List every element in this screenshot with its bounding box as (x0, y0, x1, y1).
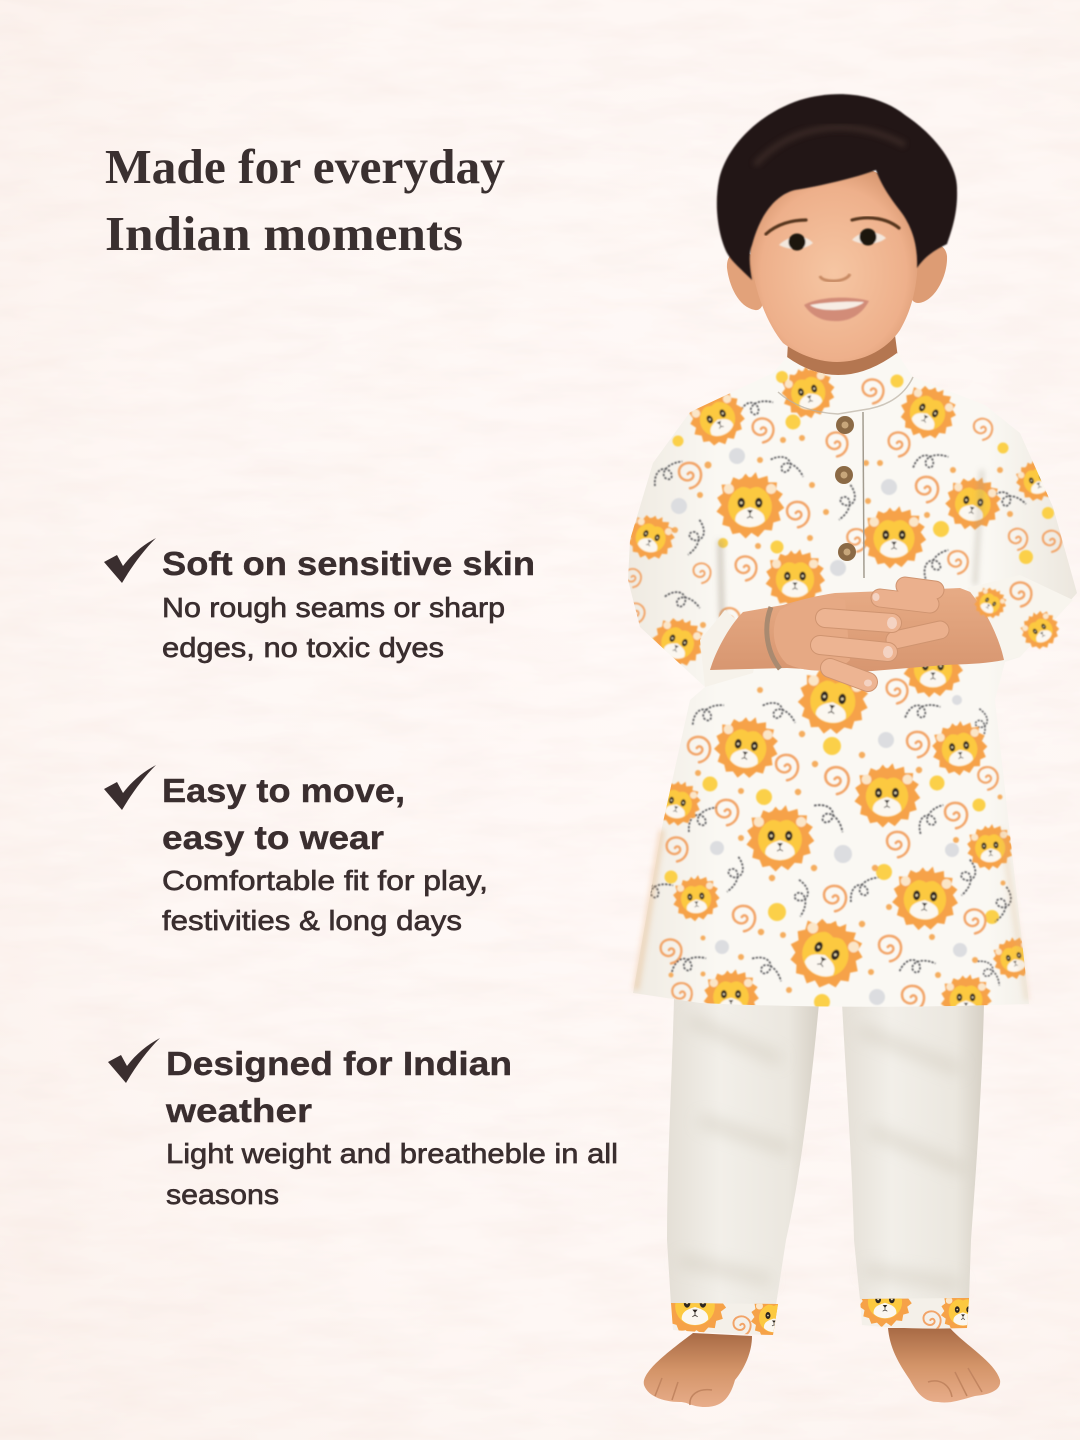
left sleeve fold (700, 610, 760, 687)
lion faces (621, 360, 1069, 1024)
face (750, 165, 918, 362)
feet (644, 1328, 1000, 1407)
right pant cuff (860, 1298, 969, 1329)
collar (778, 377, 913, 414)
ears (727, 243, 947, 310)
placket (863, 412, 864, 578)
benefit heading: Designed for Indian (166, 1045, 512, 1082)
fingernails (864, 593, 897, 686)
fingers (820, 586, 940, 682)
title: Indian moments (105, 206, 463, 261)
arms and clasped hands (710, 586, 1004, 686)
hair (717, 94, 957, 280)
benefit heading: Easy to move, (162, 772, 405, 809)
benefit description: seasons (166, 1179, 279, 1210)
benefit: designed for Indian weather (108, 1038, 618, 1210)
benefit: soft on sensitive skin (104, 538, 535, 663)
benefit description: edges, no toxic dyes (162, 632, 444, 663)
benefit description (162, 592, 505, 663)
title (105, 139, 505, 261)
pants (665, 998, 986, 1340)
benefit description: Comfortable fit for play, (162, 865, 488, 896)
pant wrinkles (680, 1020, 965, 1285)
child model (621, 94, 1077, 1407)
title: Made for everyday (105, 139, 505, 194)
benefit heading: Soft on sensitive skin (162, 545, 535, 582)
wooden buttons (835, 416, 856, 561)
benefit description: festivities & long days (162, 905, 462, 936)
bangle (767, 607, 780, 669)
hair highlight (755, 128, 905, 165)
kurta base (628, 353, 1077, 1007)
benefit: easy to move (104, 765, 488, 936)
icon: check mark (108, 1038, 160, 1083)
kurta print (621, 360, 1069, 1024)
nose (820, 274, 850, 281)
right sleeve cuff print (969, 582, 1066, 656)
benefit heading: easy to wear (162, 819, 384, 856)
eyes (779, 228, 886, 250)
kurta (621, 353, 1077, 1024)
benefit description: Light weight and breatheble in all (166, 1138, 618, 1169)
benefit description (162, 865, 488, 936)
smile (804, 298, 869, 321)
neck (787, 335, 898, 376)
yellow and grey dots (645, 371, 1054, 1010)
left pant cuff (671, 1303, 778, 1335)
head (717, 94, 957, 362)
squiggles (637, 390, 1026, 986)
benefit description (166, 1138, 618, 1210)
icon: check mark (104, 765, 156, 810)
icon: check mark (104, 538, 156, 583)
hand palms (774, 596, 850, 671)
kurta folds and side slit (636, 470, 1027, 1000)
eyebrows (766, 218, 899, 234)
benefit heading (165, 1045, 512, 1129)
benefit heading: weather (165, 1092, 312, 1129)
benefit description: No rough seams or sharp (162, 592, 505, 623)
right sleeve cuff (967, 575, 1073, 660)
benefit heading (162, 772, 405, 856)
spirals (625, 379, 1061, 1011)
forearms (710, 588, 1004, 672)
